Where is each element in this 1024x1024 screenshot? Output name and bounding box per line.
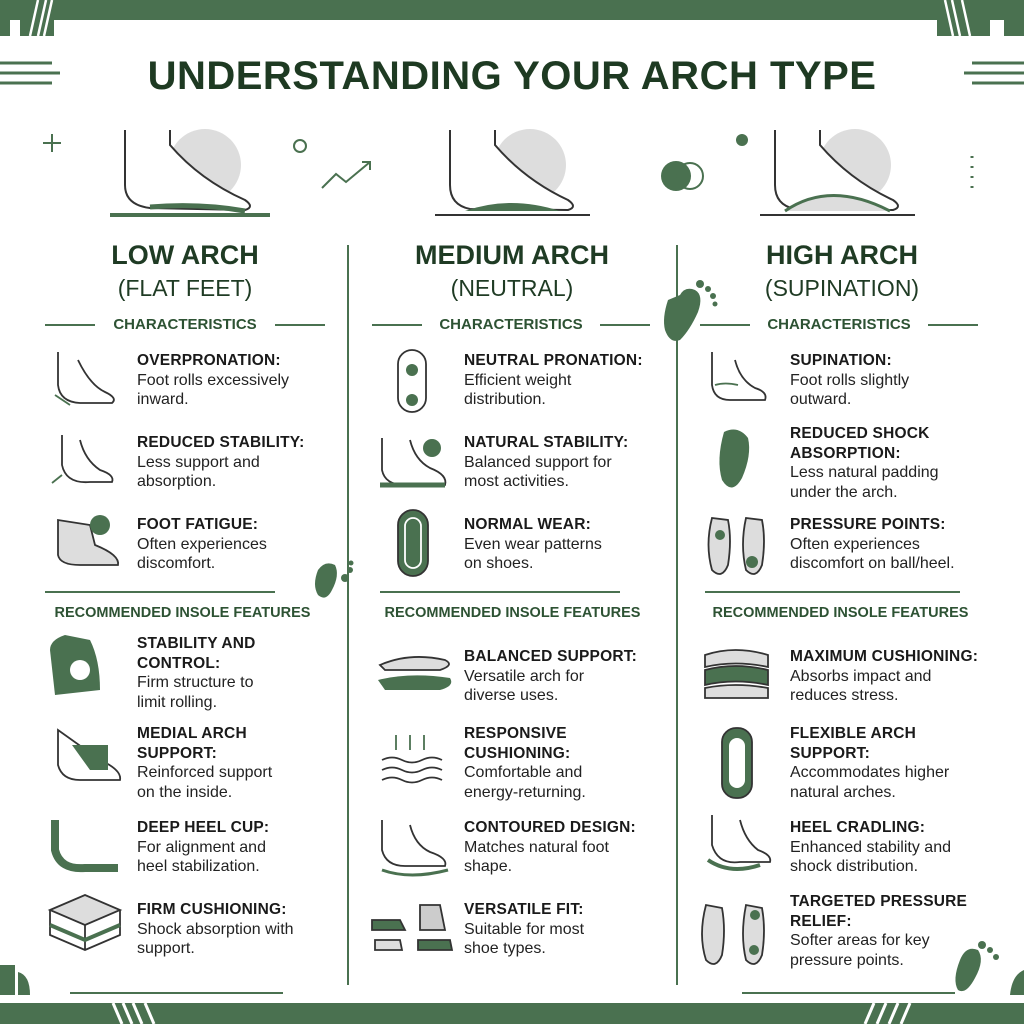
high: heel cradling: shock distribution. <box>790 858 918 875</box>
high: pressure points: discomfort on ball/heel. <box>790 555 955 572</box>
recommended headings: RECOMMENDED INSOLE FEATURES <box>55 605 310 621</box>
medium: balanced support <box>464 648 637 704</box>
medium: contoured design <box>464 819 636 875</box>
high: supination: Foot rolls slightly <box>790 372 909 388</box>
high: targeted pressure relief: pressure points. <box>790 952 904 968</box>
high: maximum cushioning: reduces stress. <box>790 687 898 704</box>
column headings: (FLAT FEET) <box>118 275 252 301</box>
low arch: stability and control: Firm structure to <box>137 674 253 691</box>
text: RECOMMENDED INSOLE FEATURES <box>713 605 968 621</box>
low arch icons <box>58 352 114 403</box>
text: (SUPINATION) <box>765 275 919 301</box>
characteristics headings: CHARACTERISTICS <box>113 316 257 333</box>
high: maximum cushioning: Absorbs impact and <box>790 668 931 684</box>
high: reduced shock absorption <box>790 425 939 500</box>
high: pressure points: PRESSURE POINTS: <box>790 516 946 533</box>
low arch: foot fatigue: FOOT FATIGUE: <box>137 516 258 533</box>
low arch: overpronation: Foot rolls excessively <box>137 372 289 388</box>
medium: versatile fit <box>464 901 584 957</box>
text: CHARACTERISTICS <box>439 316 583 333</box>
high: supination: outward. <box>790 391 851 408</box>
medium: natural stability <box>464 434 628 490</box>
medium: natural stability: Balanced support for <box>464 454 612 470</box>
low arch: reduced stability: absorption. <box>137 473 216 490</box>
title: UNDERSTANDING YOUR ARCH TYPE <box>148 54 876 98</box>
low arch: deep heel cup: heel stabilization. <box>137 858 260 875</box>
high: maximum cushioning: MAXIMUM CUSHIONING: <box>790 648 978 665</box>
low arch: reduced stability: REDUCED STABILITY: <box>137 434 304 451</box>
medium: contoured design: shape. <box>464 858 512 875</box>
medium: responsive cushioning: RESPONSIVE <box>464 725 567 742</box>
medium: responsive cushioning: Comfortable and <box>464 764 582 781</box>
low arch: stability and control <box>137 635 256 710</box>
medium: balanced support: BALANCED SUPPORT: <box>464 648 637 665</box>
medium arch icons <box>398 350 426 412</box>
top banner <box>0 0 1024 36</box>
low arch: deep heel cup <box>137 819 269 875</box>
high: supination <box>790 352 910 408</box>
high: targeted pressure relief <box>790 893 967 968</box>
high: flexible arch support: Accommodates higher <box>790 764 949 781</box>
high: flexible arch support: FLEXIBLE ARCH <box>790 725 916 742</box>
low arch: foot fatigue: Often experiences <box>137 536 267 552</box>
high: supination: SUPINATION: <box>790 352 892 369</box>
foot illustrations <box>110 129 915 217</box>
medium: normal wear <box>464 516 602 572</box>
medium: normal wear: on shoes. <box>464 555 533 572</box>
low arch: medial arch support: Reinforced support <box>137 764 272 781</box>
low arch: overpronation: OVERPRONATION: <box>137 352 281 369</box>
high: reduced shock absorption: REDUCED SHOCK <box>790 425 930 442</box>
medium: responsive cushioning <box>464 725 586 800</box>
low arch: reduced stability: Less support and <box>137 454 260 470</box>
high: flexible arch support: SUPPORT: <box>790 744 870 762</box>
decorative icons <box>43 134 974 191</box>
low arch: stability and control: limit rolling. <box>137 694 217 710</box>
medium: versatile fit: VERSATILE FIT: <box>464 901 584 918</box>
medium: versatile fit: Suitable for most <box>464 920 584 938</box>
medium: versatile fit: shoe types. <box>464 940 546 957</box>
medium: normal wear: NORMAL WEAR: <box>464 516 591 533</box>
high: reduced shock absorption: Less natural padding <box>790 464 939 481</box>
low arch: medial arch support: MEDIAL ARCH <box>137 725 247 742</box>
high: flexible arch support: natural arches. <box>790 784 896 800</box>
medium: contoured design: CONTOURED DESIGN: <box>464 819 636 836</box>
medium: balanced support: diverse uses. <box>464 687 558 704</box>
medium: balanced support: Versatile arch for <box>464 668 584 684</box>
high: heel cradling: HEEL CRADLING: <box>790 819 925 836</box>
medium: neutral pronation: distribution. <box>464 391 546 408</box>
low arch: firm cushioning <box>137 901 294 957</box>
high: flexible arch support <box>790 725 949 800</box>
low arch: foot fatigue: discomfort. <box>137 555 215 572</box>
high: reduced shock absorption: under the arch. <box>790 484 898 500</box>
text: RECOMMENDED INSOLE FEATURES <box>385 605 640 621</box>
medium: neutral pronation: Efficient weight <box>464 372 571 388</box>
high: targeted pressure relief: RELIEF: <box>790 912 852 930</box>
low arch: stability and control: STABILITY AND <box>137 635 256 652</box>
text: CHARACTERISTICS <box>767 316 911 333</box>
text: MEDIUM ARCH <box>415 240 609 270</box>
low arch: medial arch support: on the inside. <box>137 784 232 800</box>
low arch: foot fatigue <box>137 516 267 572</box>
high arch icons <box>712 352 766 400</box>
high: pressure points: Often experiences <box>790 536 920 552</box>
low arch: firm cushioning: FIRM CUSHIONING: <box>137 901 287 918</box>
low arch: deep heel cup: DEEP HEEL CUP: <box>137 819 269 836</box>
high: targeted pressure relief: Softer areas for key <box>790 932 930 949</box>
low arch: overpronation: inward. <box>137 391 189 408</box>
low arch: stability and control: CONTROL: <box>137 654 220 672</box>
medium: normal wear: Even wear patterns <box>464 536 602 552</box>
high: pressure points <box>790 516 955 572</box>
high: maximum cushioning <box>790 648 978 704</box>
high: heel cradling <box>790 819 951 875</box>
medium: natural stability: NATURAL STABILITY: <box>464 434 628 451</box>
low arch: reduced stability <box>137 434 304 490</box>
medium: responsive cushioning: CUSHIONING: <box>464 744 570 762</box>
medium: responsive cushioning: energy-returning. <box>464 784 586 800</box>
low arch: medial arch support <box>137 725 272 800</box>
medium: neutral pronation: NEUTRAL PRONATION: <box>464 352 643 369</box>
high: heel cradling: Enhanced stability and <box>790 838 951 856</box>
low arch: firm cushioning: Shock absorption with <box>137 920 294 938</box>
high: reduced shock absorption: ABSORPTION: <box>790 444 901 462</box>
low arch: firm cushioning: support. <box>137 940 195 957</box>
low arch: medial arch support: SUPPORT: <box>137 744 217 762</box>
medium: neutral pronation <box>464 352 643 408</box>
medium: natural stability: most activities. <box>464 473 569 490</box>
high: targeted pressure relief: TARGETED PRESSURE <box>790 893 967 910</box>
column headings: LOW ARCH <box>111 240 259 270</box>
text: (NEUTRAL) <box>451 275 573 301</box>
column headings <box>111 240 259 301</box>
text: HIGH ARCH <box>766 240 918 270</box>
medium: contoured design: Matches natural foot <box>464 838 609 856</box>
low arch: overpronation <box>137 352 289 408</box>
low arch: deep heel cup: For alignment and <box>137 838 266 856</box>
